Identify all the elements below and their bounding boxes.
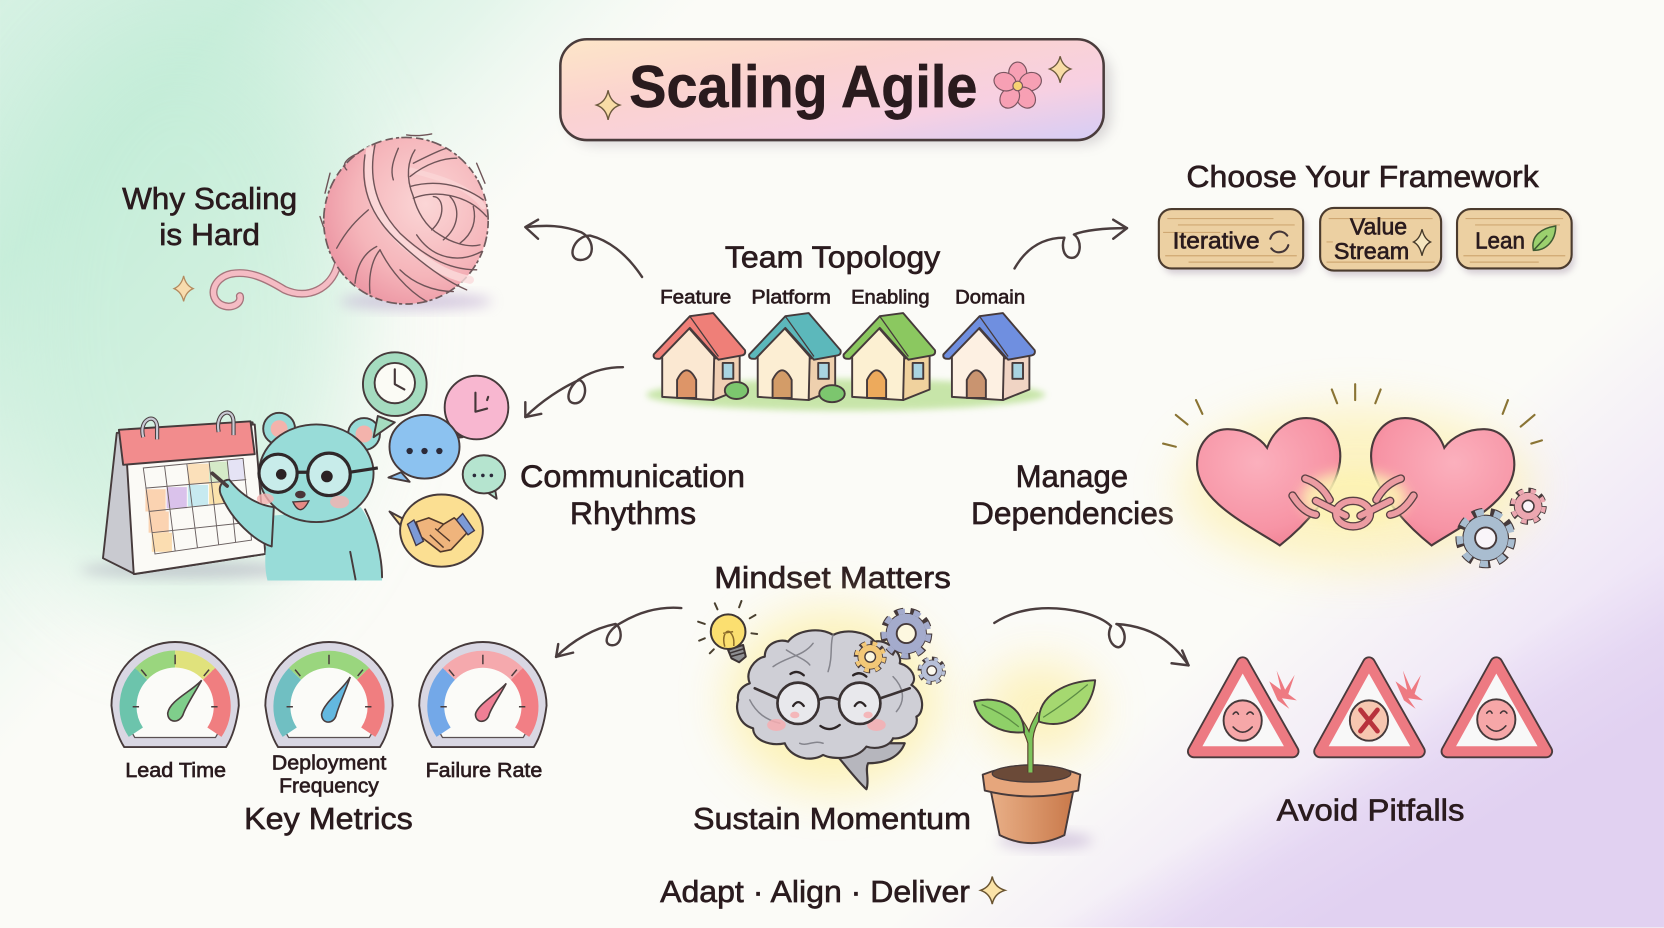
glow: chain centre: [1301, 471, 1407, 526]
board: value stream: Stream: [1334, 238, 1409, 264]
icon: yarn ball: [213, 134, 492, 310]
grass: [646, 379, 1045, 411]
arrow: topology to framework: [1015, 220, 1127, 268]
heading: avoid pitfalls: Avoid Pitfalls: [1277, 794, 1464, 827]
board: value stream: [1320, 208, 1444, 276]
board: lean: Lean: [1475, 227, 1525, 253]
glow: [1181, 409, 1531, 568]
section: communication rhythms: [80, 352, 745, 580]
label: failure rate: Failure Rate: [426, 759, 542, 782]
glow: [727, 610, 939, 791]
board: lean: [1457, 209, 1575, 274]
section: manage dependencies: [971, 384, 1544, 568]
board: iterative: [1159, 209, 1306, 274]
section: key metrics: [111, 642, 547, 836]
icon: calendar: [80, 413, 302, 578]
icon: clock bubble green: [363, 352, 427, 437]
section: team topology: [646, 241, 1045, 411]
icon: brain: [737, 630, 922, 789]
icon: sparkle right: [1050, 56, 1071, 83]
gauge: failure rate: [419, 642, 547, 747]
icon: chain: [1293, 479, 1414, 526]
icon: green house: [844, 313, 935, 400]
heading: team topology: Team Topology: [725, 241, 941, 274]
icon: small gear: [920, 658, 944, 683]
section: avoid pitfalls: [1194, 663, 1546, 827]
heading: is hard: is Hard: [159, 219, 260, 252]
arrow: mindset to metrics: [556, 608, 681, 657]
icon: blue house: [943, 313, 1035, 400]
icon: light bulb: [698, 601, 757, 662]
icon: red house: [654, 313, 748, 400]
label: platform: Platform: [751, 287, 831, 308]
heading: why scaling: Why Scaling: [122, 183, 297, 216]
heading: sustain momentum: Sustain Momentum: [693, 801, 971, 836]
section: why scaling is hard: [122, 134, 492, 310]
title banner: [560, 39, 1111, 144]
tagline: Adapt · Align · Deliver: [660, 874, 970, 909]
arrow: topology to yarn: [525, 220, 642, 277]
title text: Scaling Agile: [629, 53, 977, 120]
icon: chat bubble blue: [388, 415, 460, 482]
icon: sparkle left: [596, 90, 620, 120]
heading: dependencies: Dependencies: [971, 496, 1174, 531]
icon: left heart: [1197, 418, 1340, 545]
label: lead time: Lead Time: [125, 759, 226, 782]
heading: rhythms: Rhythms: [570, 496, 696, 531]
section: choose your framework: [1159, 161, 1575, 276]
icon: rays: [1163, 384, 1542, 447]
icon: bear character: [212, 413, 382, 580]
icon: warning triangle smile: [1194, 663, 1297, 751]
icon: clock bubble pink: [444, 376, 508, 439]
icon: sparkle: [174, 276, 193, 301]
icon: right heart: [1371, 418, 1514, 545]
icon: yellow gear: [856, 643, 884, 671]
icon: warning triangle cross: [1320, 663, 1423, 751]
gauge: lead time: [111, 642, 239, 747]
gauge: deployment frequency: [265, 642, 393, 747]
arrow: mindset to pitfalls: [994, 608, 1189, 665]
icon: small gear: [1512, 490, 1544, 522]
label: feature: Feature: [660, 287, 731, 308]
board: iterative: Iterative: [1173, 227, 1260, 253]
heading: communication: Communication: [520, 459, 745, 494]
icon: teal house: [749, 313, 845, 402]
section: mindset and momentum: [660, 562, 1098, 909]
board: value stream: Value: [1350, 214, 1407, 240]
label: enabling: Enabling: [851, 287, 930, 308]
icon: chat bubble small green: [463, 455, 505, 499]
icon: handshake bubble: [389, 495, 483, 567]
icon: tagline sparkle: [981, 877, 1005, 904]
heading: manage: Manage: [1016, 459, 1128, 494]
label: deployment: Deployment: [272, 751, 387, 774]
icon: plant in pot: [974, 661, 1098, 849]
heading: key metrics: Key Metrics: [244, 801, 413, 836]
heading: choose your framework: Choose Your Framework: [1186, 161, 1540, 194]
label: frequency: Frequency: [279, 775, 380, 798]
label: domain: Domain: [955, 287, 1025, 308]
icon: blue gear: [883, 611, 929, 656]
arrow: topology to communication: [525, 367, 623, 417]
icon: flower: [992, 62, 1044, 112]
heading: mindset matters: Mindset Matters: [714, 562, 951, 595]
icon: warning triangle smile right: [1447, 663, 1546, 751]
icon: large gear: [1459, 511, 1512, 565]
